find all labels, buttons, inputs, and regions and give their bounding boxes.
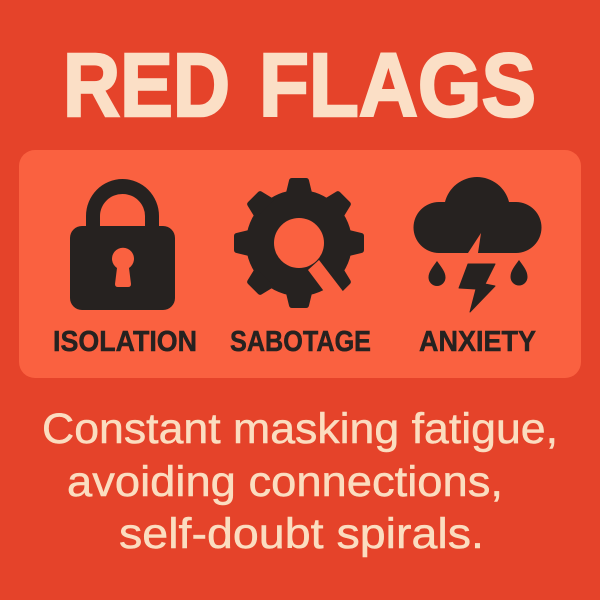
label: sabotage: SABOTAGE [230, 326, 371, 358]
description text: self-doubt spirals. [119, 510, 484, 558]
title [63, 36, 536, 136]
icon: gear with magnifier slot [234, 178, 364, 308]
label: anxiety: ANXIETY [419, 326, 536, 358]
description text: avoiding connections, [67, 458, 503, 506]
icon: padlock [70, 179, 175, 310]
title: RED [63, 36, 230, 136]
title: FLAGS [259, 36, 536, 136]
label: isolation: ISOLATION [53, 326, 197, 358]
description text [42, 405, 558, 558]
panel: warning signs [19, 150, 581, 378]
icon: storm cloud [414, 177, 542, 312]
description text: Constant masking fatigue, [42, 405, 558, 453]
